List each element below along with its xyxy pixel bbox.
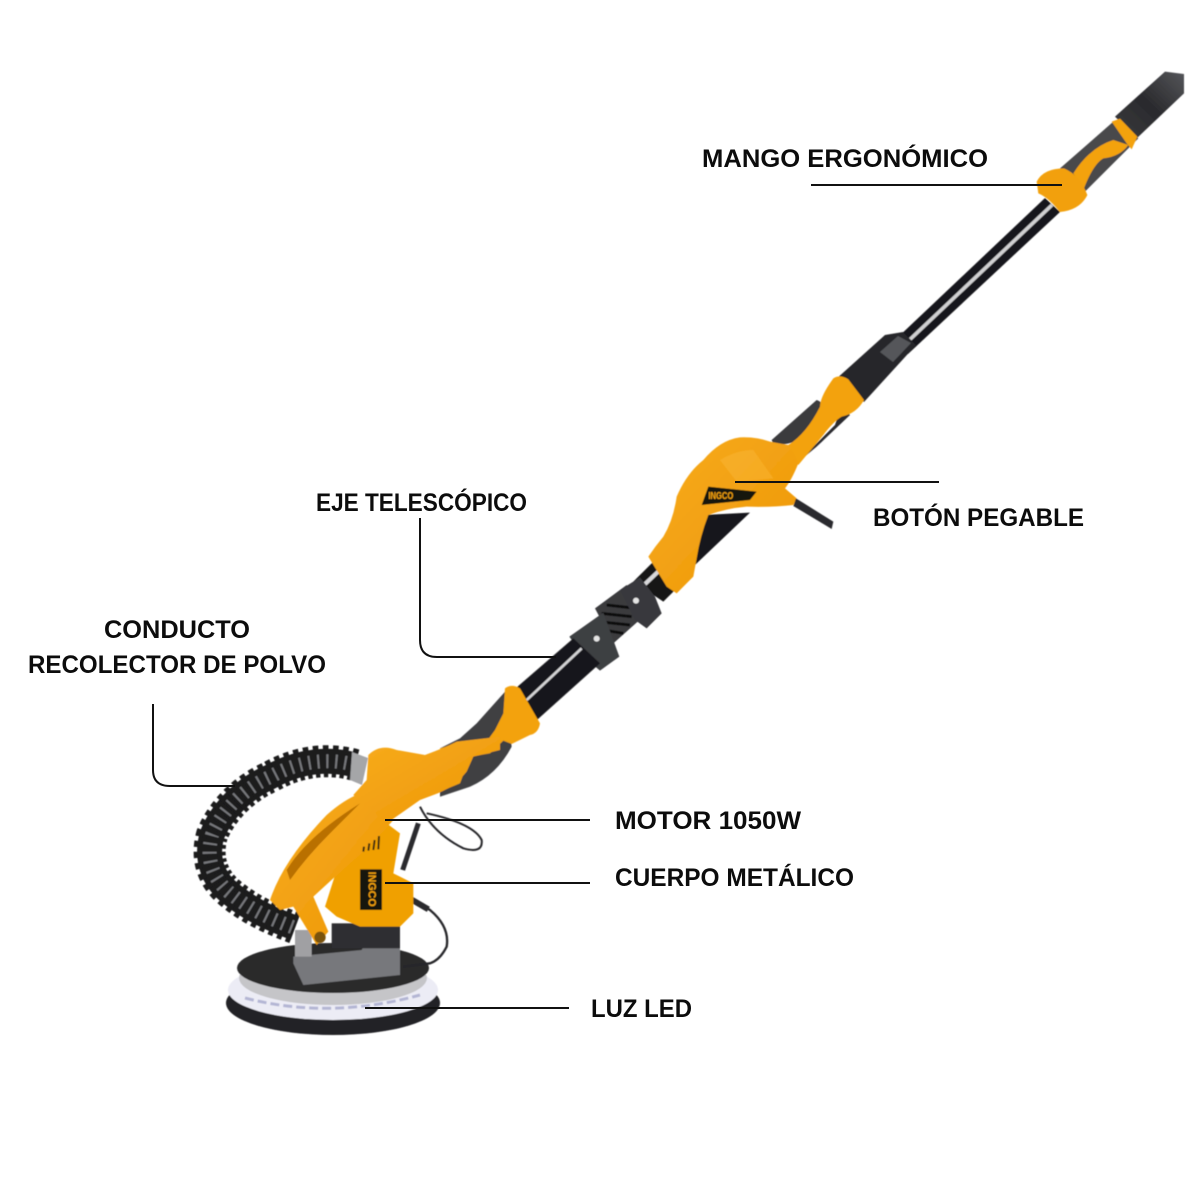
vents [363, 836, 379, 852]
orange arm and motor body [270, 737, 500, 985]
label: CUERPO METÁLICO: CUERPO METÁLICO [615, 863, 854, 892]
arm frame [270, 793, 393, 945]
label: CONDUCTO RECOLECTOR DE POLVO [28, 616, 326, 786]
upper telescopic tube [895, 198, 1060, 354]
label: EJE TELESCÓPICO [316, 487, 556, 657]
dust hose [210, 752, 368, 928]
ergonomic handle [1037, 72, 1184, 212]
LED ring [228, 960, 438, 1020]
brand label: INGCO [708, 491, 734, 502]
cables [420, 807, 482, 850]
product: drywall sander [210, 72, 1184, 1035]
trigger [793, 498, 833, 529]
sanding disc [226, 943, 440, 1035]
label: LUZ LED: LUZ LED [591, 995, 692, 1023]
rear grip [772, 400, 824, 445]
sticky button handle [569, 376, 864, 671]
motor label: INGCO [366, 872, 378, 907]
disc top [237, 943, 429, 993]
lower tube and grip [440, 638, 600, 797]
collar [788, 376, 864, 465]
base block [293, 943, 400, 985]
upper grip joint [835, 332, 916, 402]
motor label [360, 869, 382, 910]
label: MANGO ERGONÓMICO: MANGO ERGONÓMICO [702, 143, 988, 173]
telescopic clamp [595, 585, 643, 643]
label: BOTÓN PEGABLE: BOTÓN PEGABLE [873, 502, 1084, 532]
label: MOTOR 1050W: MOTOR 1050W [615, 807, 801, 835]
brand label [702, 487, 757, 505]
label: EJE TELESCÓPICO: EJE TELESCÓPICO [316, 487, 527, 517]
label: CONDUCTO RECOLECTOR DE POLVO: CONDUCTO [104, 616, 250, 644]
motor housing [332, 923, 400, 948]
brush [226, 971, 440, 1035]
label: CONDUCTO RECOLECTOR DE POLVO: RECOLECTOR DE POLVO [28, 651, 326, 679]
main body [648, 437, 798, 593]
head [353, 737, 500, 823]
lower tube [633, 558, 682, 602]
